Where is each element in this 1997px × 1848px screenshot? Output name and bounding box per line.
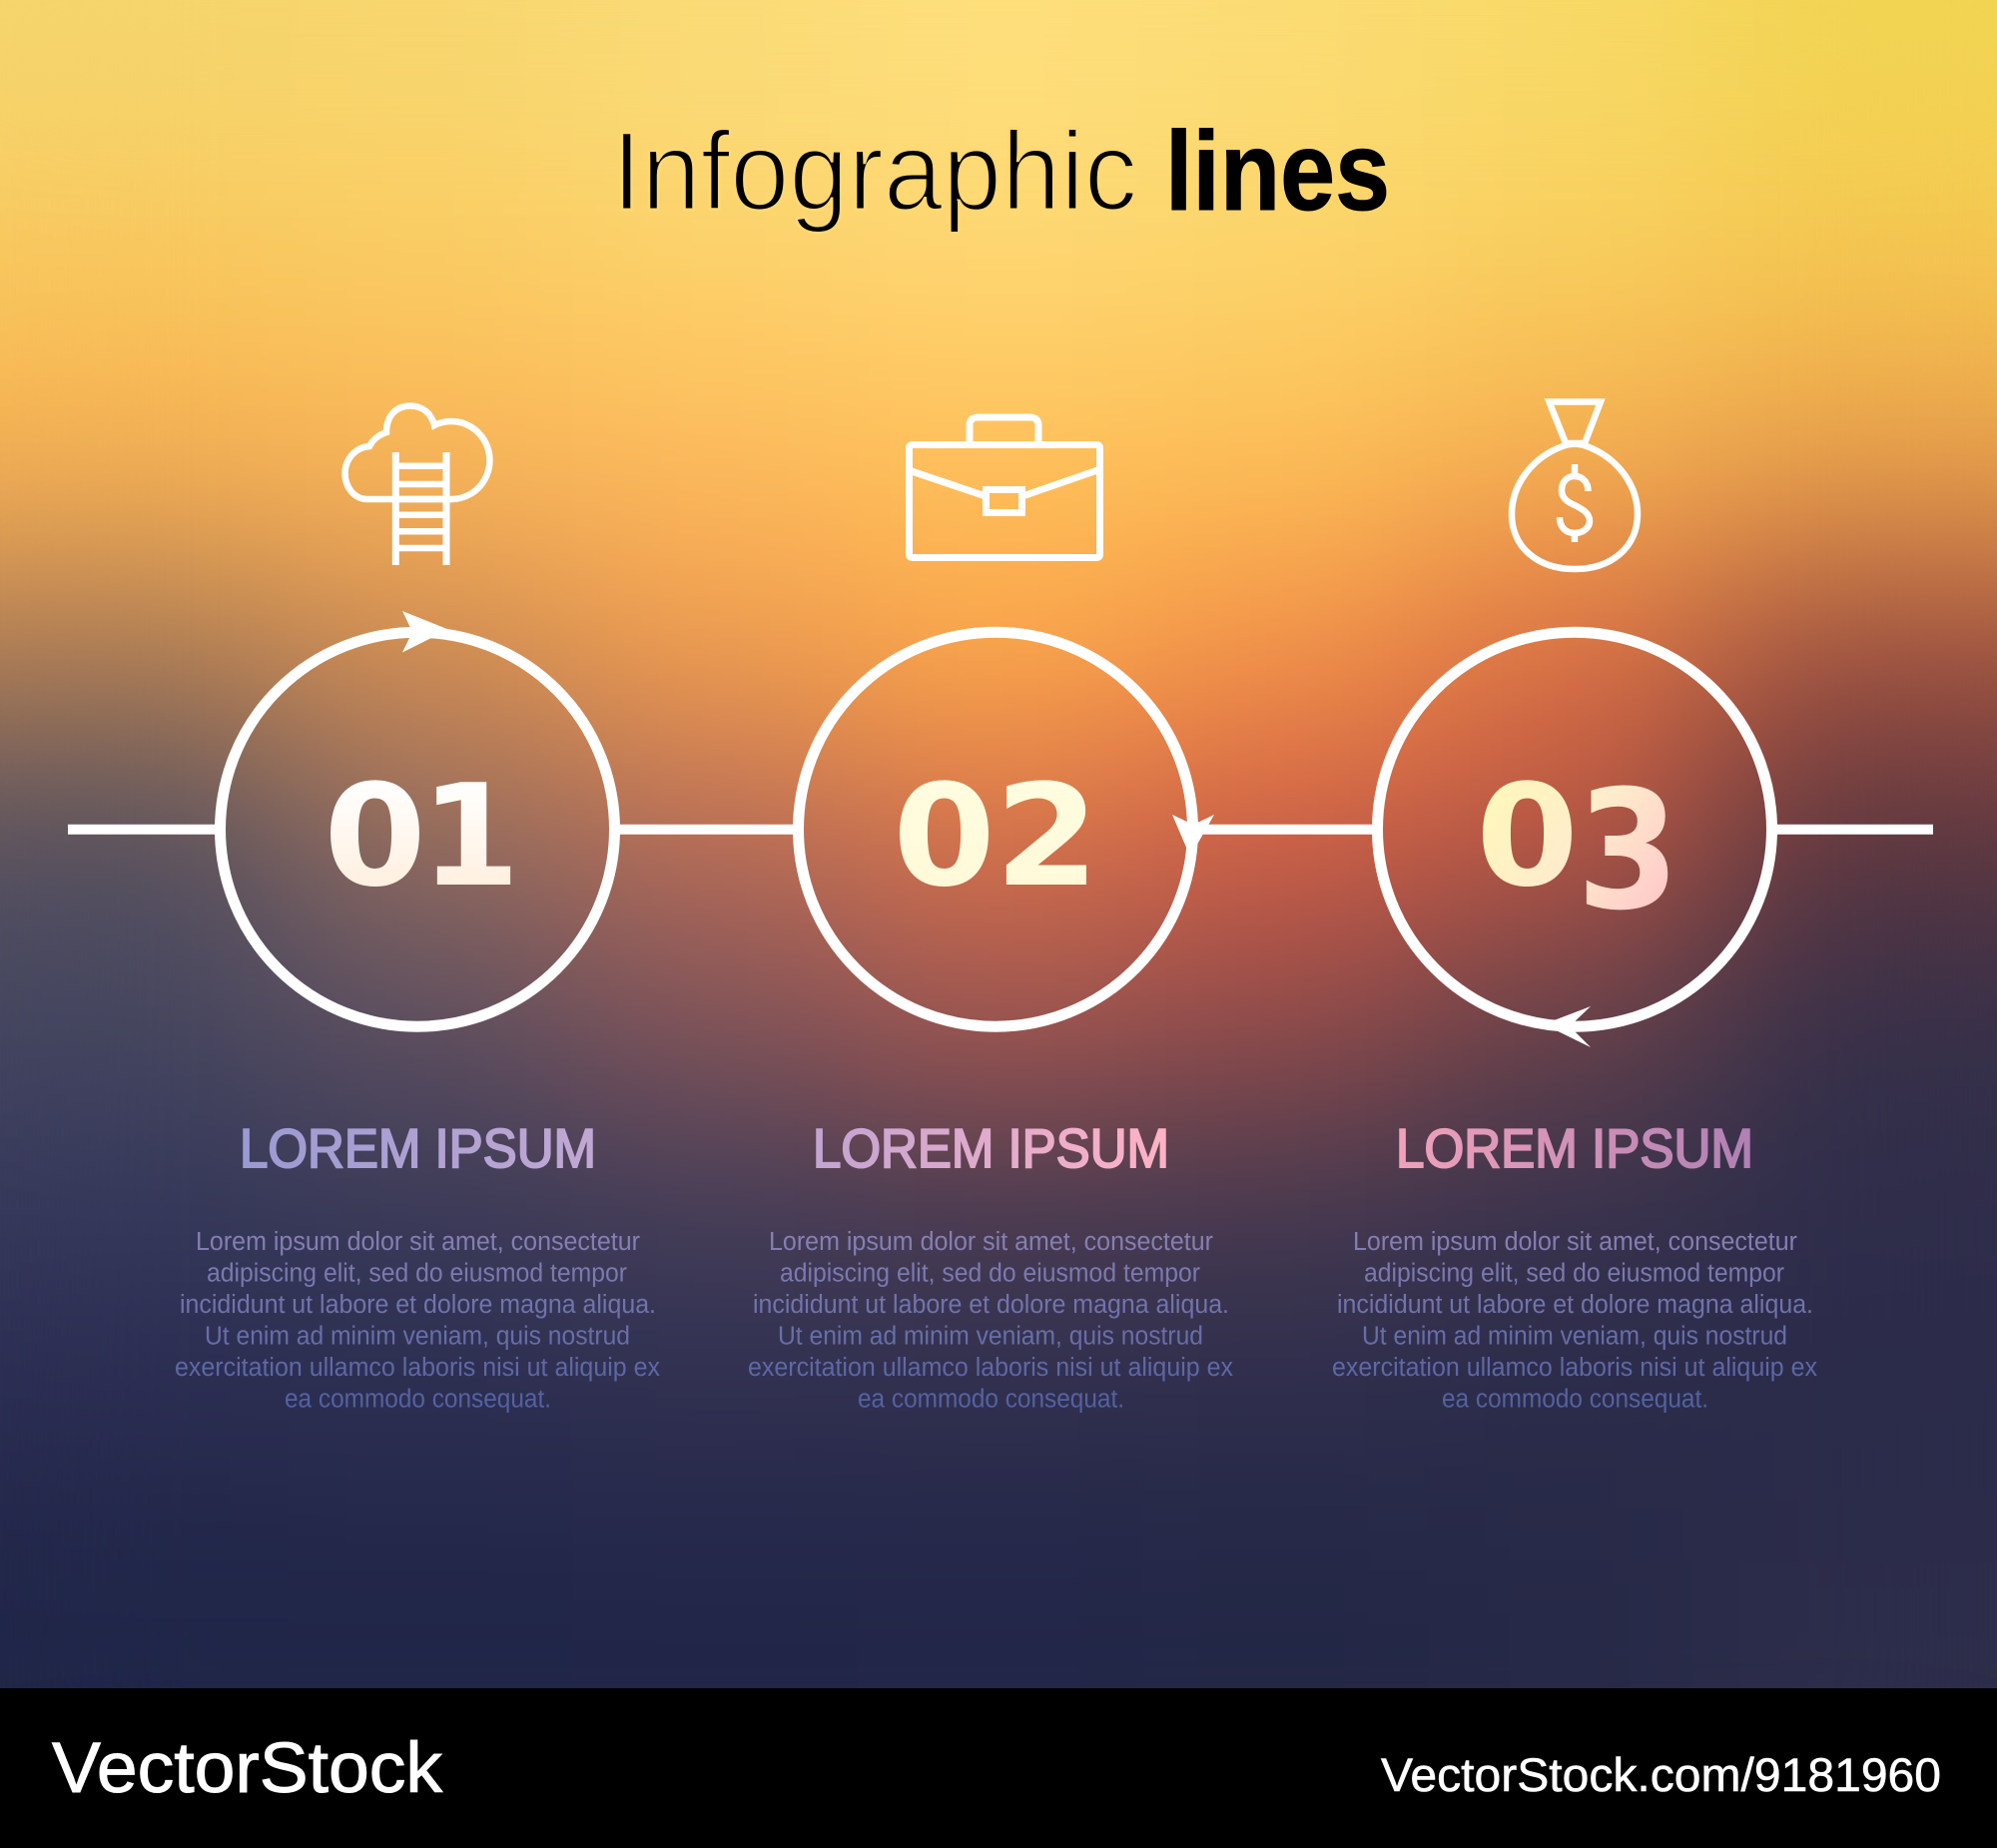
image id text: VectorStock.com/9181960 xyxy=(1381,1748,1941,1801)
number 03 xyxy=(1476,755,1679,946)
body text: exercitation ullamco laboris nisi ut aliquip ex xyxy=(748,1354,1233,1382)
footer bar xyxy=(0,1688,1997,1848)
number 03: 0 xyxy=(1476,755,1579,919)
body text: Lorem ipsum dolor sit amet, consectetur xyxy=(1353,1228,1797,1256)
body text: incididunt ut labore et dolore magna aliqua. xyxy=(753,1291,1229,1319)
number 01: 0 xyxy=(324,755,426,919)
body text: adipiscing elit, sed do eiusmod tempor xyxy=(207,1260,627,1288)
number 02: 0 xyxy=(893,755,996,919)
brand logo text: VectorStock xyxy=(52,1729,443,1808)
number 03: 3 xyxy=(1577,755,1679,946)
body text: ea commodo consequat. xyxy=(1442,1386,1708,1414)
timeline connector line xyxy=(68,825,1933,835)
body text: adipiscing elit, sed do eiusmod tempor xyxy=(780,1260,1200,1288)
body text: ea commodo consequat. xyxy=(285,1386,551,1414)
body text xyxy=(175,1228,660,1414)
body text xyxy=(748,1228,1233,1414)
heading: LOREM IPSUM xyxy=(1396,1117,1753,1179)
body text: Ut enim ad minim veniam, quis nostrud xyxy=(205,1322,630,1350)
icon: briefcase xyxy=(909,417,1100,557)
body text: ea commodo consequat. xyxy=(858,1386,1124,1414)
body text: adipiscing elit, sed do eiusmod tempor xyxy=(1364,1260,1784,1288)
heading: LOREM IPSUM xyxy=(813,1117,1169,1179)
icon: money bag xyxy=(1512,401,1638,569)
body text: incididunt ut labore et dolore magna aliqua. xyxy=(1337,1291,1813,1319)
step 3 xyxy=(1332,401,1817,1414)
body text xyxy=(1332,1228,1817,1414)
circle with arrow xyxy=(220,611,615,1026)
body text: Lorem ipsum dolor sit amet, consectetur xyxy=(769,1228,1213,1256)
number 02 xyxy=(893,755,1099,919)
number 01: 1 xyxy=(420,755,520,919)
step 2 xyxy=(748,417,1233,1414)
circle with arrow xyxy=(799,632,1214,1026)
body text: Ut enim ad minim veniam, quis nostrud xyxy=(778,1322,1203,1350)
icon: cloud with ladder xyxy=(345,405,489,565)
title: lines xyxy=(1165,109,1390,234)
body text: Ut enim ad minim veniam, quis nostrud xyxy=(1362,1322,1787,1350)
number 02: 2 xyxy=(995,755,1099,919)
heading: LOREM IPSUM xyxy=(240,1117,596,1179)
circle with arrow xyxy=(1378,632,1771,1047)
step 1 xyxy=(175,405,660,1414)
title: Infographic xyxy=(612,109,1137,234)
body text: incididunt ut labore et dolore magna aliqua. xyxy=(180,1291,656,1319)
body text: Lorem ipsum dolor sit amet, consectetur xyxy=(196,1228,640,1256)
number 01 xyxy=(324,755,520,919)
body text: exercitation ullamco laboris nisi ut aliquip ex xyxy=(1332,1354,1817,1382)
body text: exercitation ullamco laboris nisi ut aliquip ex xyxy=(175,1354,660,1382)
